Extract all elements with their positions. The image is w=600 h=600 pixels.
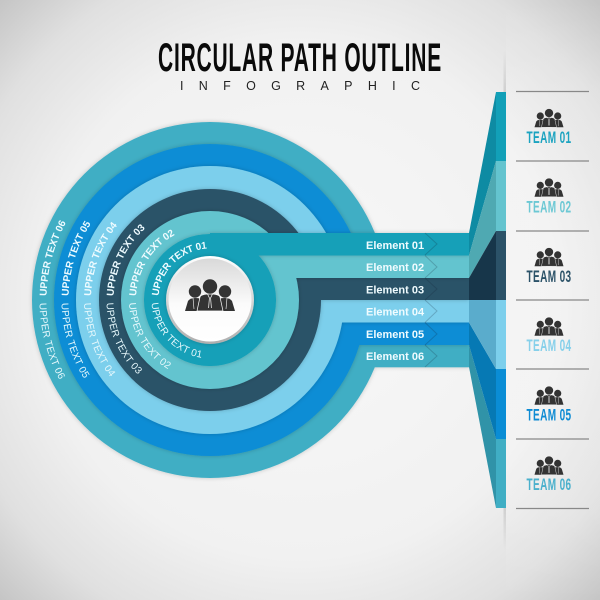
lower text labels: UPPER TEXT 03	[106, 303, 142, 374]
upper text labels: UPPER TEXT 02	[129, 230, 174, 296]
panel seam shadow	[504, 50, 506, 550]
ring and band 01	[144, 233, 469, 366]
team 04: TEAM 04	[526, 337, 572, 355]
team 03	[526, 248, 572, 286]
band chevrons	[425, 233, 437, 367]
team 06	[526, 456, 572, 494]
lower text labels: UPPER TEXT 02	[129, 303, 171, 369]
element labels: Element 03	[366, 284, 424, 296]
element labels: Element 05	[366, 329, 424, 341]
center badge	[166, 256, 254, 344]
ring and band 04	[76, 166, 469, 434]
team 05	[526, 386, 572, 424]
element labels: Element 06	[366, 351, 424, 363]
upper text labels	[40, 220, 207, 296]
ring and band 02	[121, 211, 469, 389]
circular diagram	[30, 120, 469, 480]
upper text labels: UPPER TEXT 05	[62, 220, 90, 296]
team 05: TEAM 05	[526, 406, 572, 424]
ring and band 06	[32, 122, 469, 478]
color strip	[496, 92, 506, 508]
lower text labels: UPPER TEXT 01	[152, 302, 202, 358]
team 02	[526, 178, 572, 216]
lower text labels: UPPER TEXT 06	[40, 304, 65, 379]
element labels: Element 01	[366, 240, 424, 252]
element labels	[366, 240, 425, 363]
upper text labels: UPPER TEXT 03	[106, 224, 144, 296]
upper text labels: UPPER TEXT 06	[40, 220, 66, 296]
upper text labels: UPPER TEXT 04	[84, 222, 117, 296]
element labels: Element 04	[366, 306, 425, 318]
lower text labels	[40, 302, 202, 379]
icon: center people	[185, 279, 235, 311]
team 01	[526, 109, 572, 147]
right side panel background	[506, 0, 600, 600]
folded connectors	[469, 92, 496, 508]
team 02: TEAM 02	[526, 198, 572, 216]
ring and band 03	[99, 189, 469, 411]
upper text labels: UPPER TEXT 01	[152, 242, 207, 296]
lower text labels: UPPER TEXT 05	[62, 304, 90, 378]
lower text labels: UPPER TEXT 04	[84, 303, 116, 376]
team 03: TEAM 03	[526, 268, 572, 286]
subtitle: INFOGRAPHIC	[180, 79, 420, 93]
team 04	[526, 317, 572, 355]
team 06: TEAM 06	[526, 476, 572, 494]
team dividers	[516, 92, 589, 508]
ring and band 05	[54, 144, 469, 456]
element labels: Element 02	[366, 262, 424, 274]
team 01: TEAM 01	[526, 129, 572, 147]
